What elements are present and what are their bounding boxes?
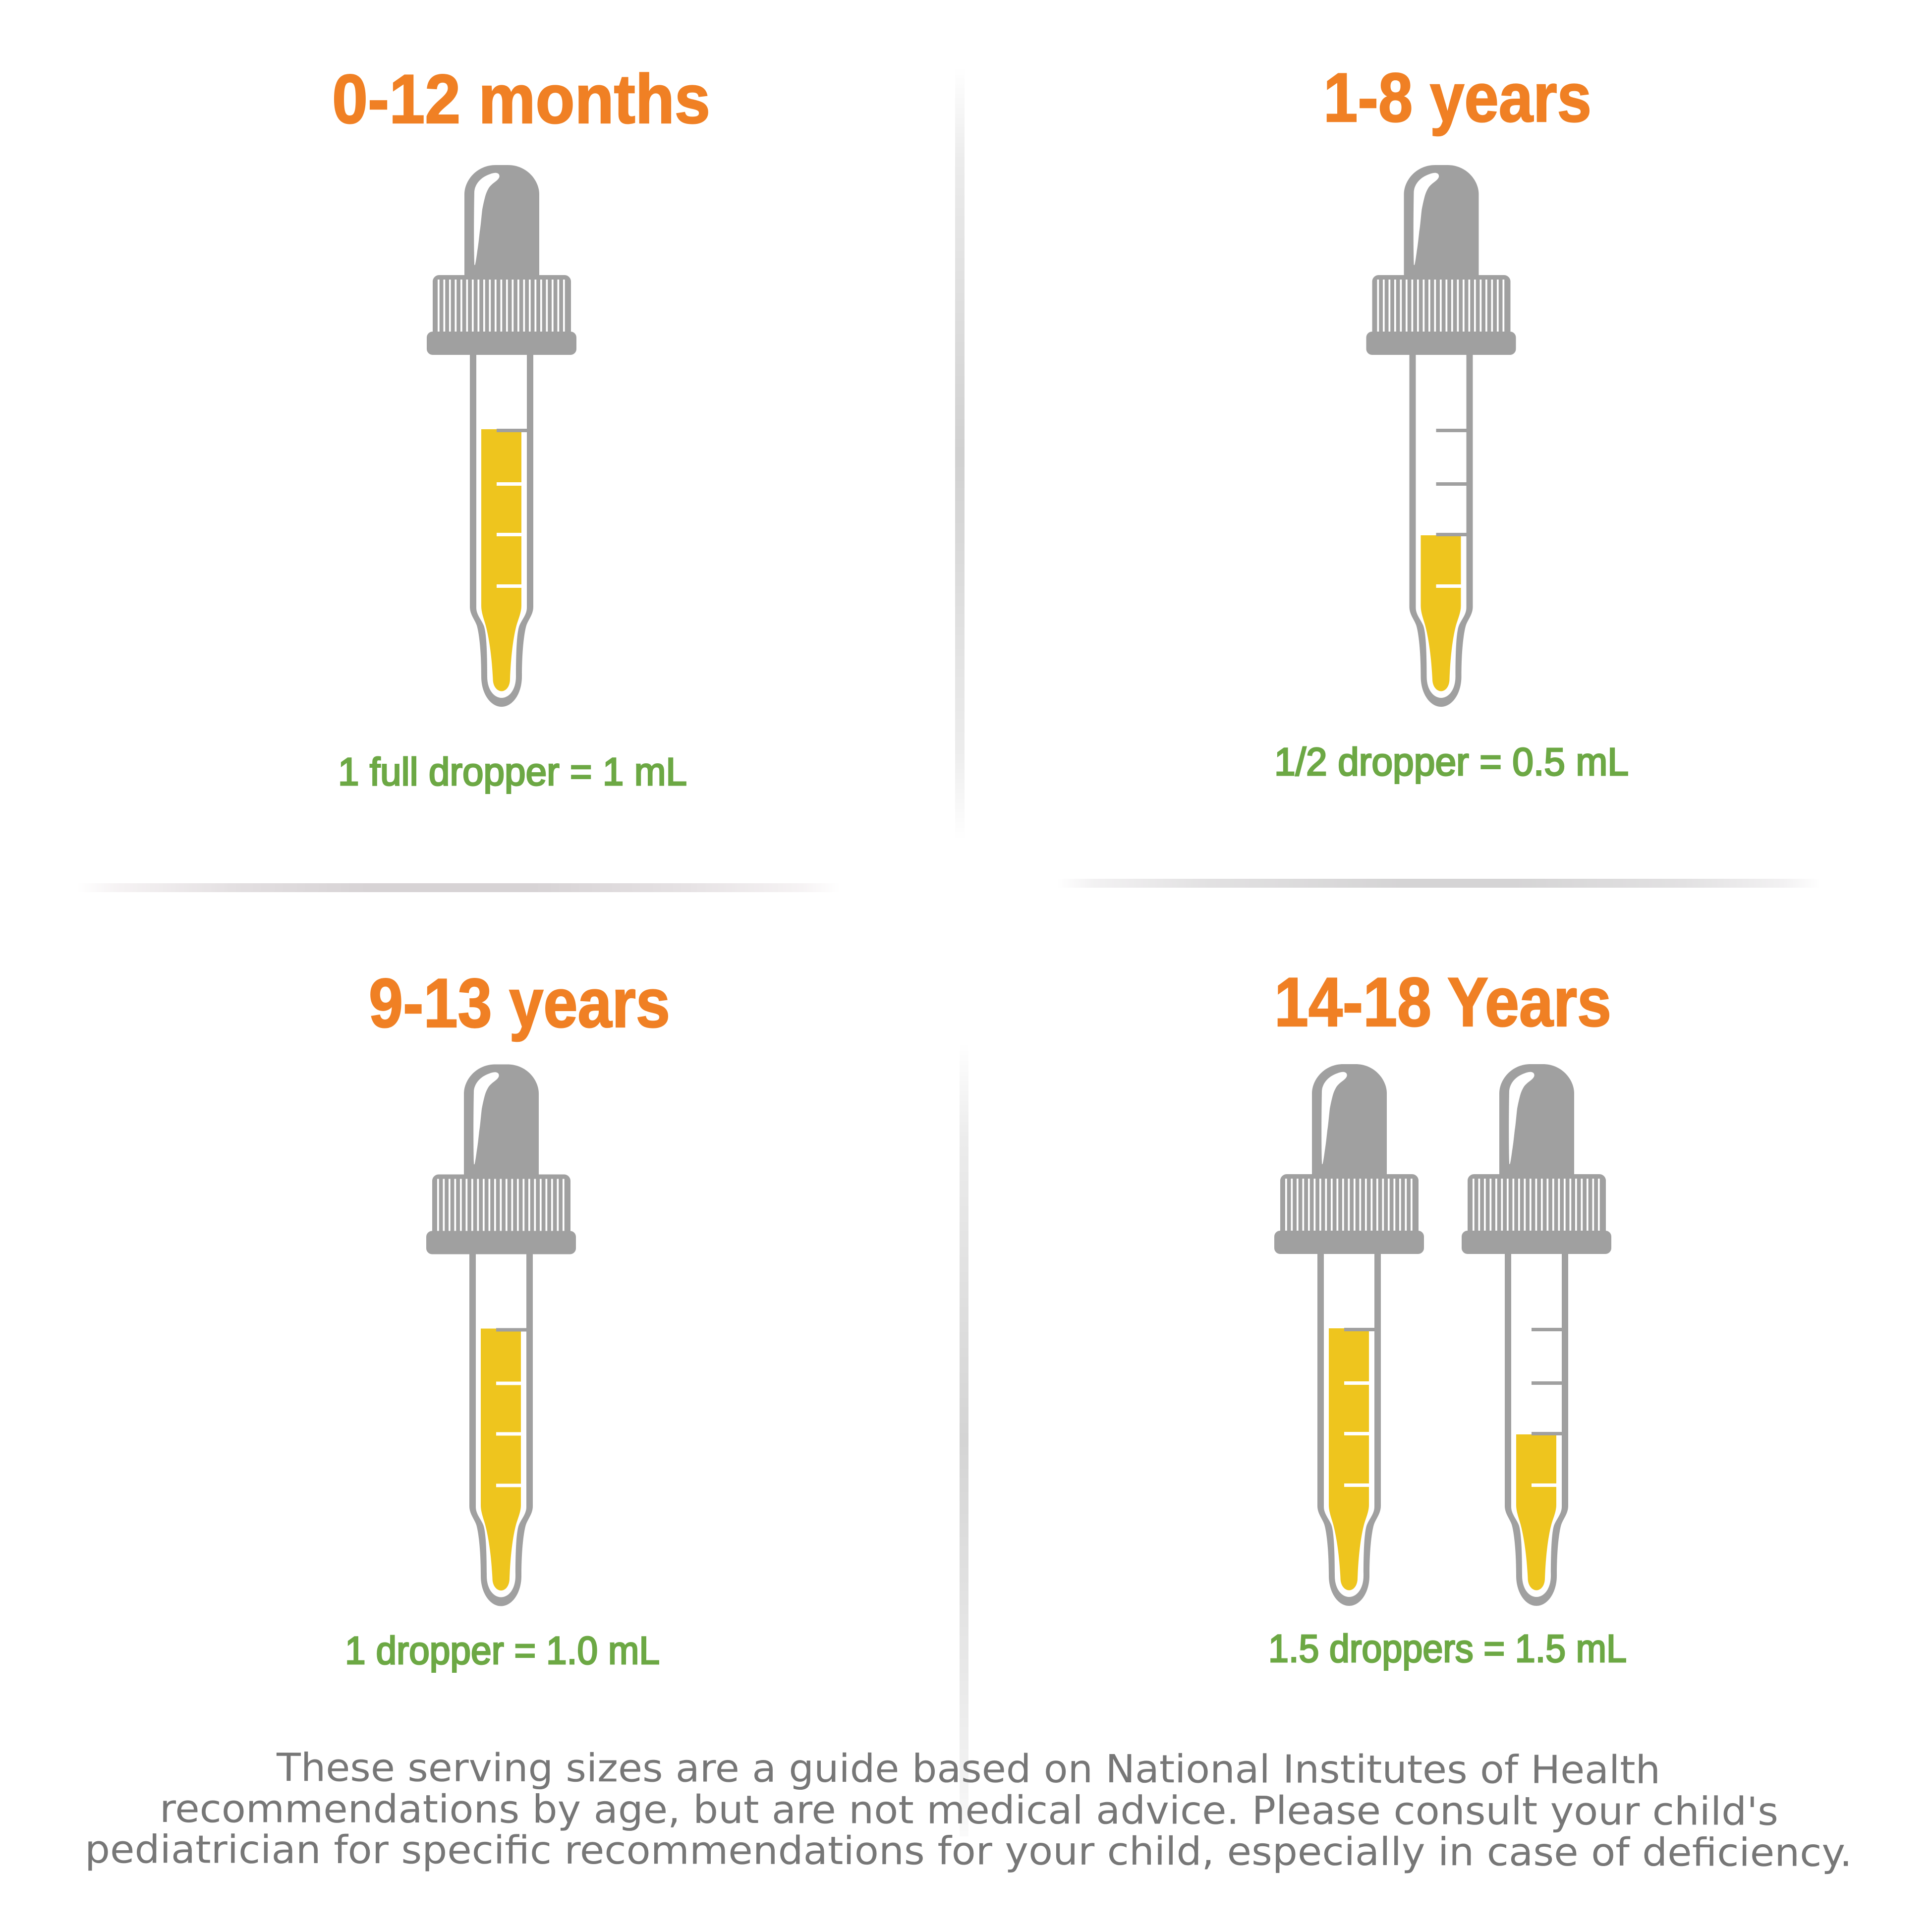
icon: full dropper [426, 1065, 576, 1606]
icon: half dropper [1366, 165, 1516, 707]
heading: 14-18 Years: 14-18 Years [1274, 963, 1611, 1041]
footer disclaimer text [85, 1746, 1852, 1875]
icon: half dropper [1462, 1064, 1611, 1606]
panel: 1-8 years [1274, 58, 1629, 784]
heading: 0-12 months: 0-12 months [332, 60, 710, 138]
footer disclaimer text: These serving sizes are a guide based on National Institutes of Health [276, 1746, 1660, 1793]
footer disclaimer text: recommendations by age, but are not medical advice. Please consult your child's [160, 1787, 1778, 1834]
label: 1 dropper: 1 dropper = 1.0 mL [345, 1628, 660, 1672]
icon: full dropper [427, 165, 576, 707]
heading: 9-13 years: 9-13 years [369, 964, 670, 1042]
label: 1.5 droppers: 1.5 droppers = 1.5 mL [1268, 1626, 1627, 1670]
panel: 0-12 months [332, 60, 710, 794]
icon: full dropper [1274, 1064, 1424, 1606]
heading: 1-8 years: 1-8 years [1323, 58, 1591, 136]
footer disclaimer text: pediatrician for specific recommendations for your child, especially in case of deficiency. [85, 1827, 1852, 1875]
label: 1 full dropper: 1 full dropper = 1 mL [338, 749, 687, 794]
panel: 14-18 years [1268, 963, 1627, 1670]
panel: 9-13 years [345, 964, 670, 1672]
label: 1/2 dropper: 1/2 dropper = 0.5 mL [1274, 739, 1629, 784]
